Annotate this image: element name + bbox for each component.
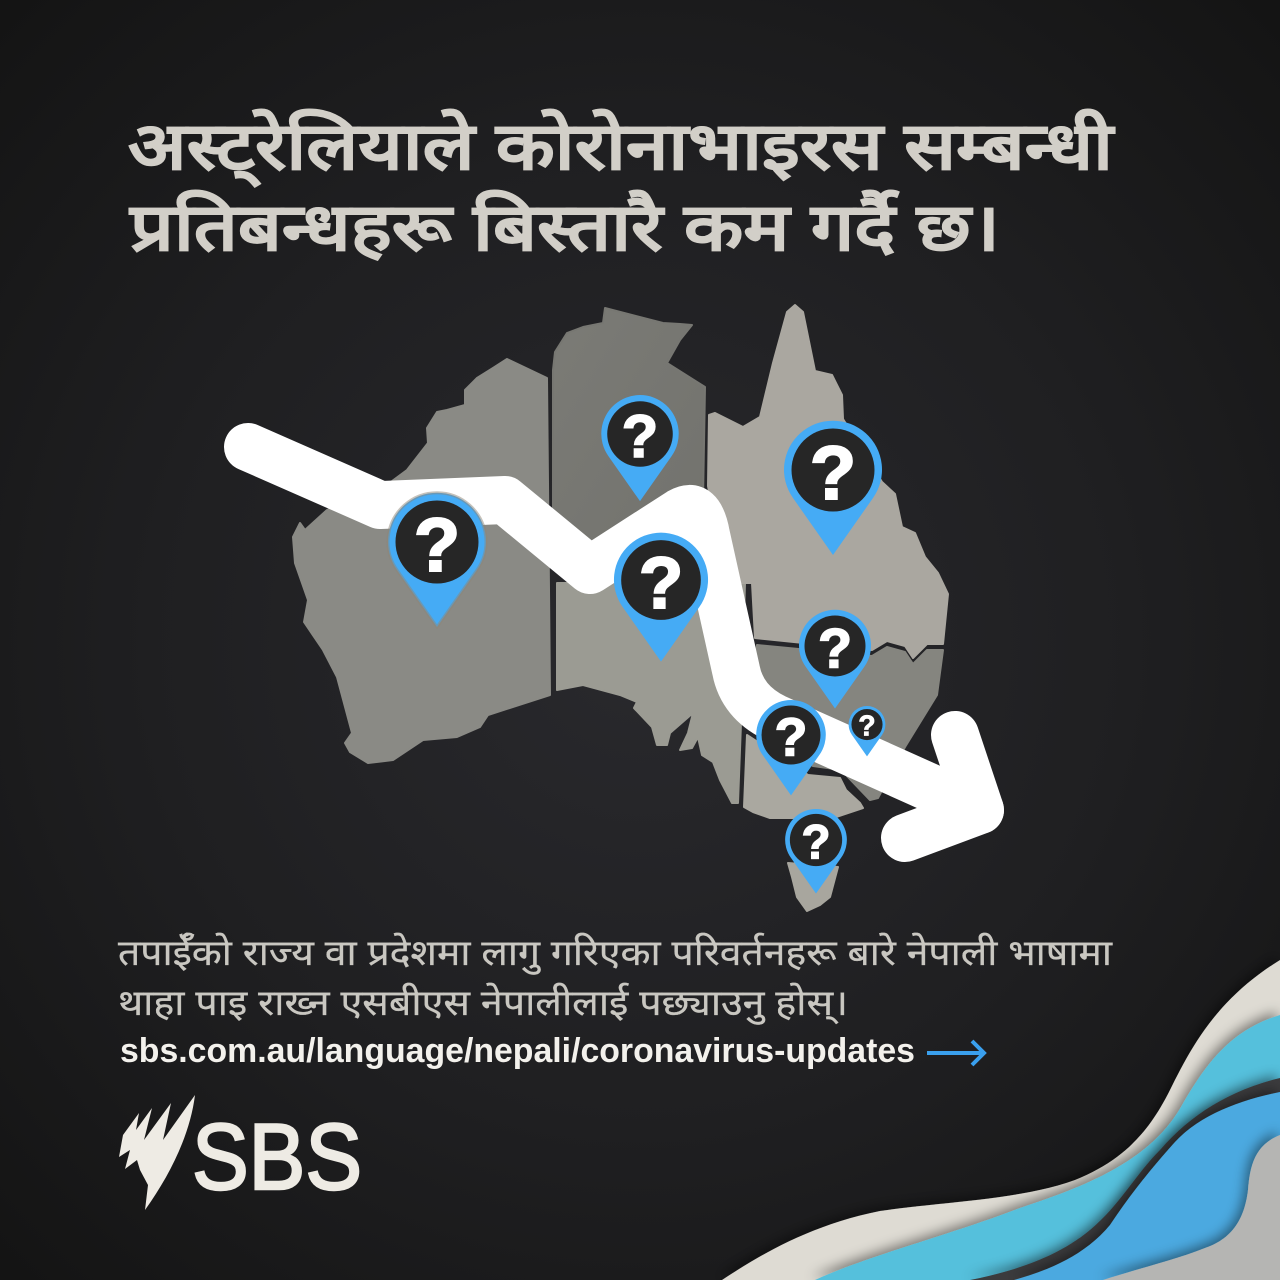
wave: white layer [722,960,1280,1280]
wave: cyan layer [815,1015,1280,1280]
url link: sbs.com.au/language/nepali/coronavirus-updates [120,1032,915,1070]
icon: link arrow [927,1041,984,1065]
pin: Western Australia: ? [414,503,460,588]
title: अस्ट्रेलियाले कोरोनाभाइरस सम्बन्धी [128,108,1116,189]
body text [118,932,1113,1025]
body text: थाहा पाइ राख्न एसबीएस नेपालीलाई पछ्याउनु होस्। [118,982,848,1025]
pin: South Australia [614,533,708,662]
pin: Victoria [756,700,826,795]
pin: Queensland: ? [810,431,856,516]
state: Tasmania [788,863,838,911]
pin: South Australia: ? [639,543,683,624]
pin: Tasmania [785,809,847,894]
logo wordmark: SBS [192,1104,362,1209]
state: Victoria [744,735,863,818]
state: Western Australia [293,359,550,763]
wave: dark layer [970,1078,1280,1280]
pin: Northern Territory: ? [622,403,658,470]
state: South Australia [557,583,745,803]
body text: तपाईँको राज्य वा प्रदेशमा लागु गरिएका परिवर्तनहरू बारे नेपाली भाषामा [118,932,1113,975]
pin: Queensland [784,421,882,555]
pin: Victoria: ? [775,708,807,768]
state: Queensland [708,305,948,658]
state: New South Wales [747,645,943,800]
icon: SBS mercury [119,1095,195,1210]
wave: grey layer [1103,1135,1280,1280]
state: Northern Territory [553,308,705,560]
pin: Northern Territory [601,395,679,501]
wave: blue layer [1014,1092,1280,1280]
pin: Australian Capital Territory [849,706,885,756]
trend arrow [248,447,980,838]
title [128,108,1116,264]
decorative paper waves [722,960,1280,1280]
pin: Australian Capital Territory: ? [858,710,876,742]
pin: New South Wales: ? [818,616,852,679]
pin: New South Wales [799,610,871,708]
pin: Western Australia [388,493,486,627]
SBS logo [119,1095,362,1210]
title: प्रतिबन्धहरू बिस्तारै कम गर्दै छ। [128,189,1000,264]
map of Australia [293,305,948,911]
pin: Tasmania: ? [801,816,831,869]
